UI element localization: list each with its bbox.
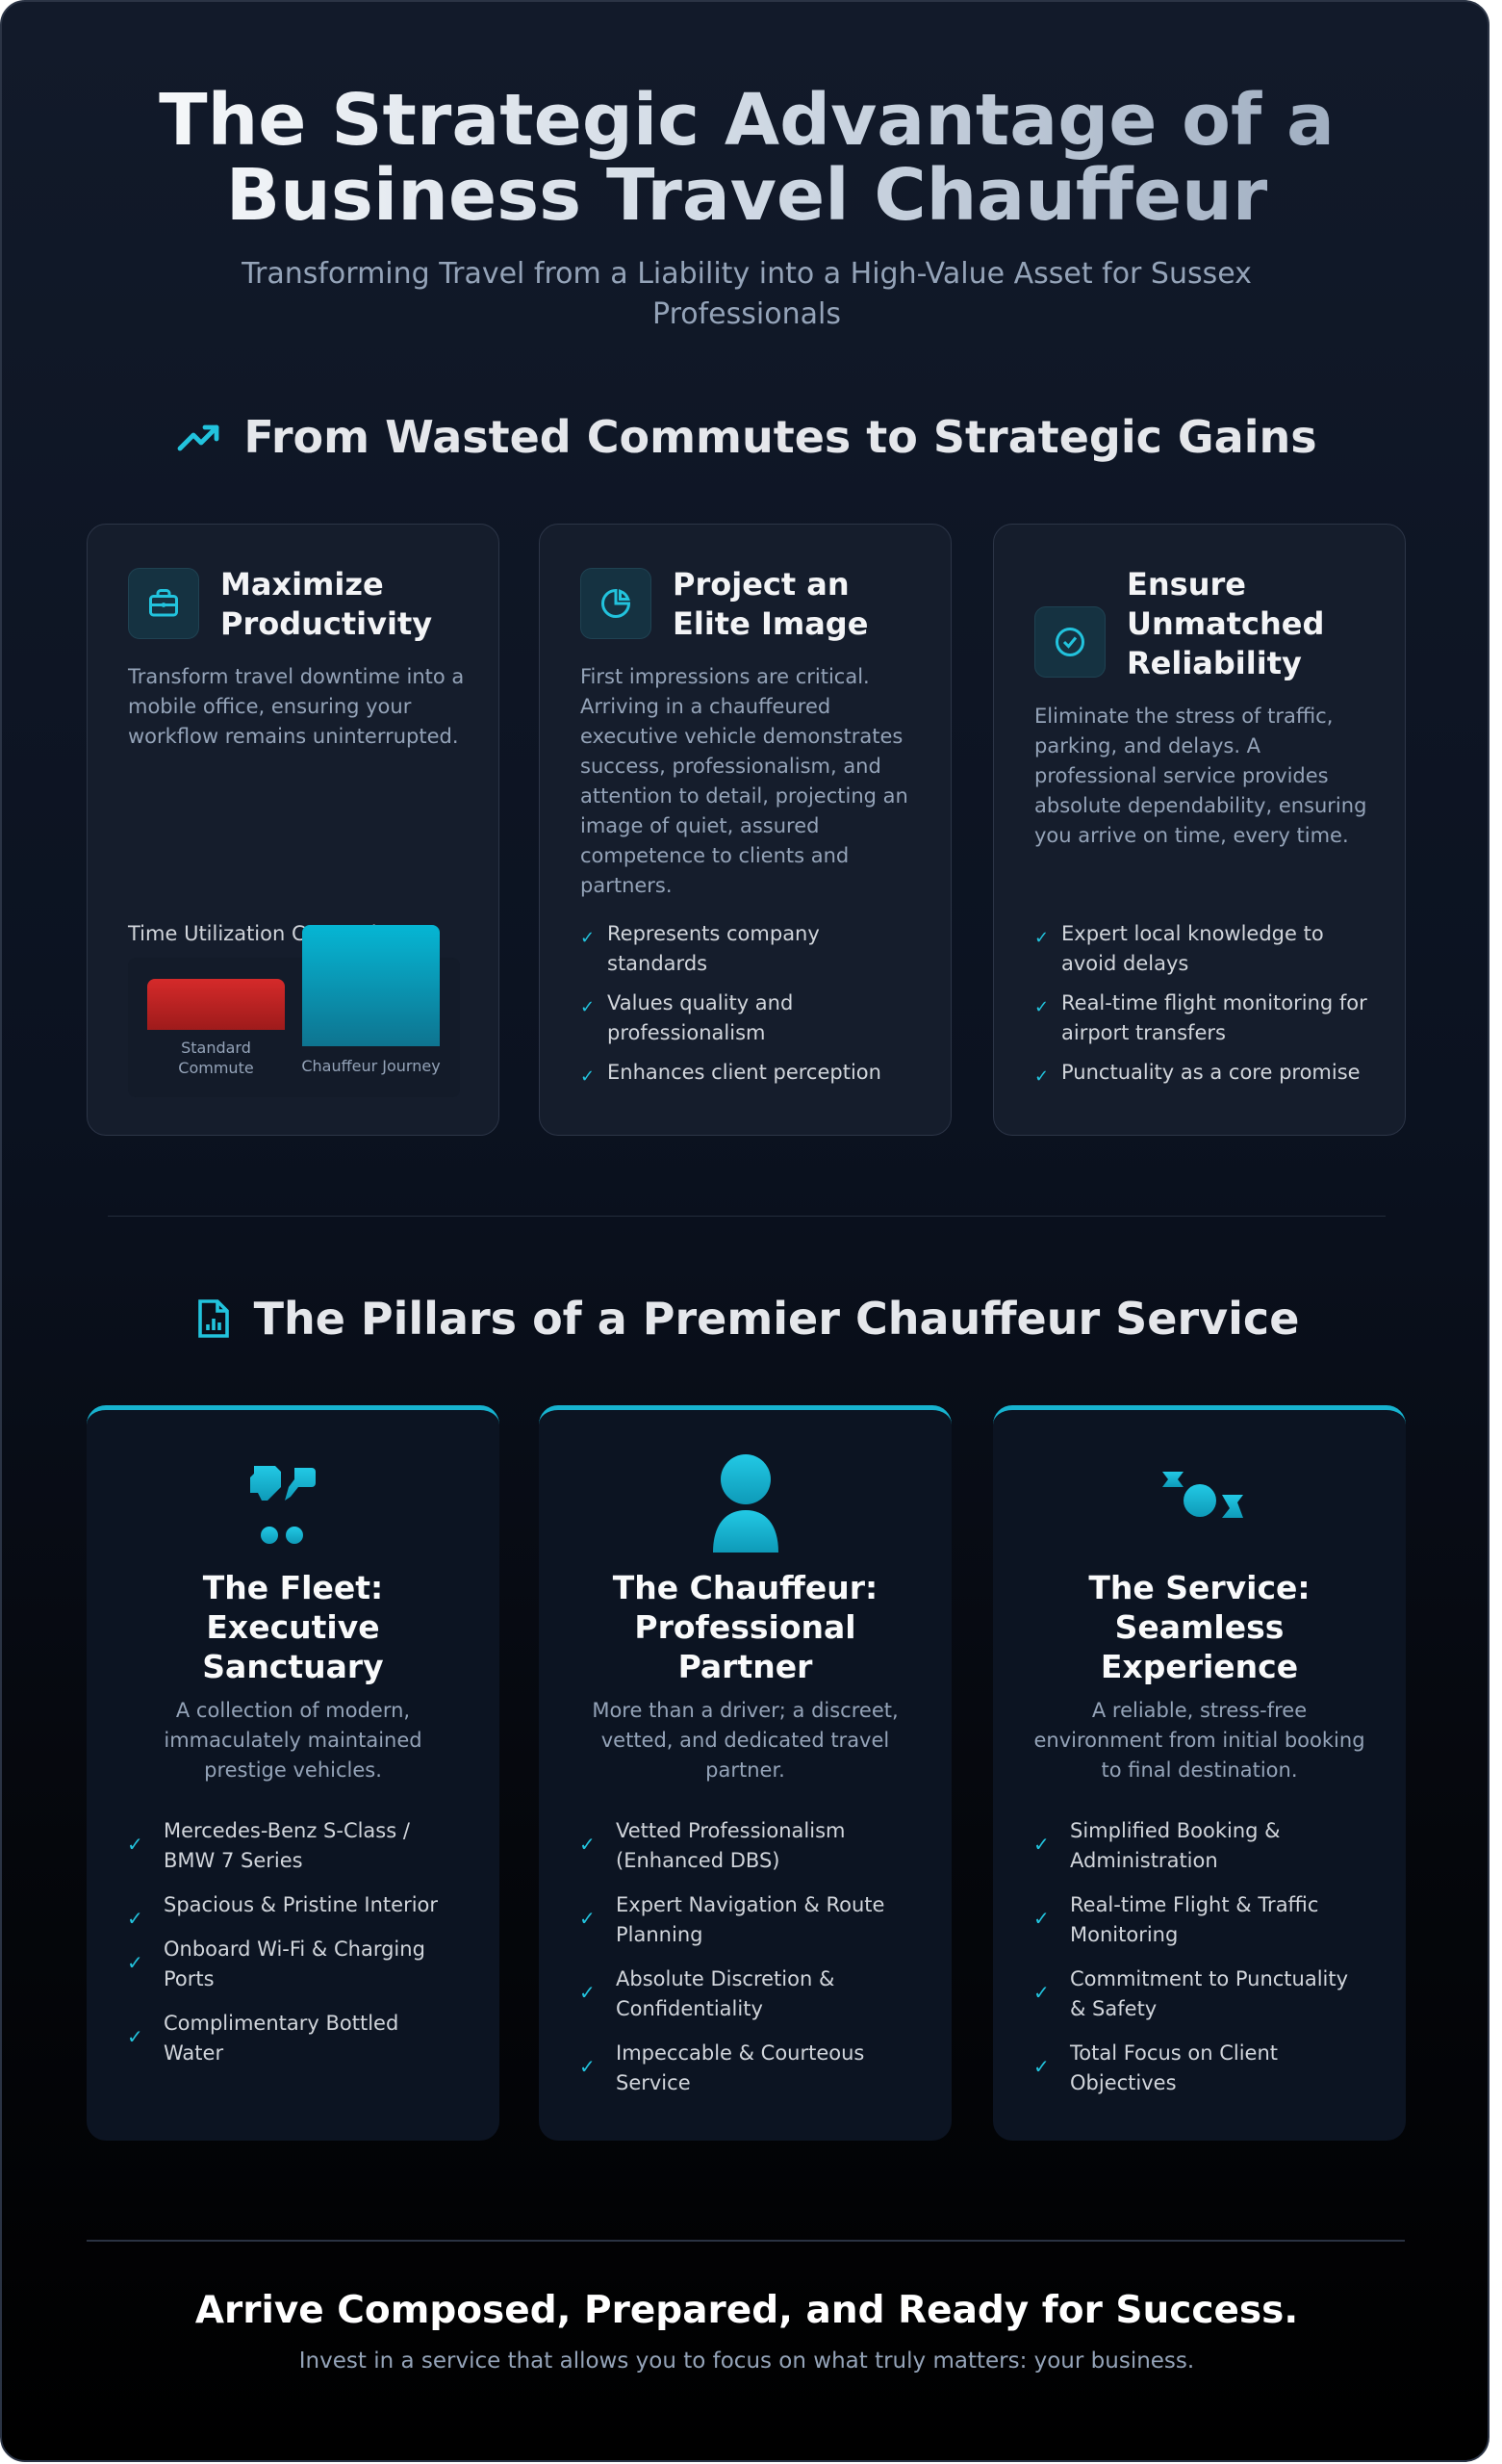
- card title: [1127, 566, 1324, 681]
- panel: the fleet: [87, 1405, 499, 2141]
- pillar title: The Fleet:: [203, 1569, 383, 1606]
- card title: Reliability: [1127, 645, 1302, 681]
- card title: Project an: [673, 566, 850, 603]
- heading: from wasted commutes: From Wasted Commutes to Strategic Gains: [243, 411, 1317, 463]
- icon: pie chart: [580, 568, 651, 639]
- checklist: Vetted Professionalism (Enhanced DBS): [616, 1819, 845, 1872]
- bar chart: Chauffeur Journey: [301, 1057, 441, 1075]
- icon: person: [713, 1454, 778, 1553]
- bar chart: Standard: [181, 1039, 251, 1057]
- bar chart: [127, 922, 441, 1077]
- card title: Elite Image: [673, 605, 868, 642]
- card title: Ensure: [1127, 566, 1246, 603]
- pillar text: A reliable, stress-free environment from initial booking to final destination.: [1033, 1699, 1365, 1782]
- pillar title: [1088, 1569, 1311, 1685]
- icon: car: [250, 1466, 316, 1544]
- card title: Productivity: [220, 605, 432, 642]
- heading: pillars: The Pillars of a Premier Chauffeur Service: [254, 1293, 1299, 1345]
- bar chart: Time Utilization Comparison: [128, 922, 413, 945]
- pillar title: Executive: [206, 1608, 380, 1646]
- card title: [673, 566, 868, 642]
- pillar title: Experience: [1101, 1648, 1298, 1685]
- panel: the service: [993, 1405, 1406, 2141]
- checklist: Values quality and professionalism: [607, 991, 793, 1044]
- panel: the chauffeur: [539, 1405, 952, 2141]
- card title: Maximize: [220, 566, 384, 603]
- checklist: Complimentary Bottled Water: [164, 2012, 398, 2065]
- checklist: Enhances client perception: [607, 1061, 881, 1084]
- checklist: Represents company standards: [607, 922, 820, 975]
- checklist: Commitment to Punctuality & Safety: [1070, 1967, 1348, 2020]
- pillar title: The Chauffeur:: [613, 1569, 878, 1606]
- checklist: Absolute Discretion & Confidentiality: [616, 1967, 834, 2020]
- checklist: [583, 922, 881, 1084]
- footer heading: Arrive Composed, Prepared, and Ready for Success.: [195, 2289, 1298, 2332]
- panel: reliability: [993, 524, 1406, 1136]
- icon: service: [1162, 1472, 1243, 1518]
- card text: Eliminate the stress of traffic, parking, and delays. A professional service provides absolute dependability, ensuring you arrive on time, every time.: [1034, 705, 1366, 847]
- pillar title: Sanctuary: [202, 1648, 384, 1685]
- card text: Transform travel downtime into a mobile office, ensuring your workflow remains uninterrupted.: [128, 665, 464, 748]
- checklist: Real-time Flight & Traffic Monitoring: [1070, 1893, 1318, 1946]
- checklist: Expert Navigation & Route Planning: [616, 1893, 884, 1946]
- card text: First impressions are critical. Arriving in a chauffeured executive vehicle demonstrates success, professionalism, and attention to detail, projecting an image of quiet, assured competence to clients and partners.: [580, 665, 908, 897]
- pillar title: Seamless: [1115, 1608, 1284, 1646]
- title: [2, 83, 1491, 233]
- footer text: Invest in a service that allows you to focus on what truly matters: your business.: [299, 2348, 1194, 2374]
- checklist: [130, 1819, 438, 2065]
- pillar title: [612, 1569, 878, 1685]
- checklist: Onboard Wi-Fi & Charging Ports: [164, 1938, 425, 1990]
- pillar title: Professional: [634, 1608, 856, 1646]
- checklist: Total Focus on Client Objectives: [1070, 2041, 1278, 2094]
- checklist: [582, 1819, 884, 2094]
- icon: briefcase: [128, 568, 199, 639]
- bar chart: Commute: [178, 1059, 254, 1077]
- title: Business Travel Chauffeur: [226, 154, 1267, 237]
- panel: maximize productivity: [87, 524, 499, 1136]
- checklist: [1036, 1819, 1348, 2094]
- checklist: Simplified Booking & Administration: [1070, 1819, 1281, 1872]
- pillar text: More than a driver; a discreet, vetted, and dedicated travel partner.: [592, 1699, 899, 1782]
- pillar text: A collection of modern, immaculately maintained prestige vehicles.: [164, 1699, 422, 1782]
- card title: [220, 566, 432, 642]
- checklist: Impeccable & Courteous Service: [616, 2041, 864, 2094]
- pillar title: [202, 1569, 384, 1685]
- pillar title: Partner: [678, 1648, 812, 1685]
- icon: check circle: [1034, 606, 1106, 678]
- checklist: Spacious & Pristine Interior: [164, 1893, 438, 1916]
- subtitle: Transforming Travel from a Liability into a High-Value Asset for Sussex Professionals: [242, 257, 1252, 331]
- checklist: Real-time flight monitoring for airport transfers: [1061, 991, 1367, 1044]
- checklist: Punctuality as a core promise: [1061, 1061, 1361, 1084]
- checklist: Mercedes-Benz S-Class / BMW 7 Series: [164, 1819, 410, 1872]
- panel: elite image: [539, 524, 952, 1136]
- card title: Unmatched: [1127, 605, 1324, 642]
- checklist: [1037, 922, 1367, 1084]
- checklist: Expert local knowledge to avoid delays: [1061, 922, 1324, 975]
- pillar title: The Service:: [1088, 1569, 1311, 1606]
- title: The Strategic Advantage of a: [159, 79, 1335, 162]
